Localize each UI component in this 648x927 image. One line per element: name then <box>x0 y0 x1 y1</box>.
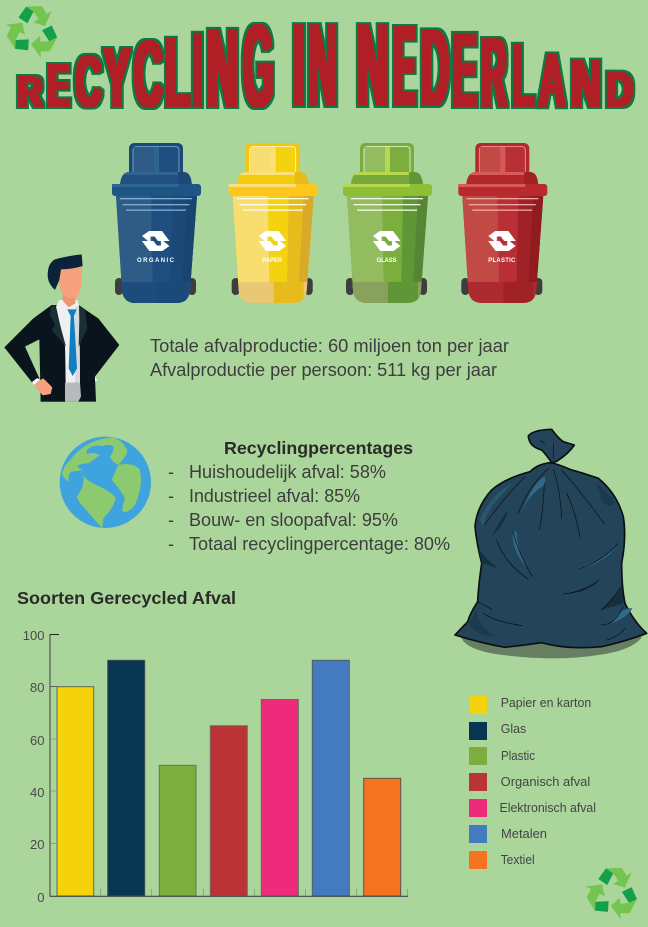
icon: green glass bin <box>343 143 432 303</box>
icon: recycling symbol top left <box>2 6 62 60</box>
title: C <box>134 23 163 127</box>
bar: Glas 90 <box>108 660 145 896</box>
bar: Metalen 90 <box>312 660 349 896</box>
bar: Organisch afval 65 <box>210 726 247 896</box>
title <box>18 0 633 131</box>
axis labels: 60 <box>30 733 44 748</box>
icon: recycling symbol bottom right <box>581 868 641 922</box>
legend: Papier en karton <box>501 696 591 710</box>
icon: garbage bag <box>455 429 647 658</box>
title: A <box>539 37 565 123</box>
title: L <box>165 18 190 127</box>
icon: blue organic bin <box>112 143 201 303</box>
title: N <box>357 0 388 130</box>
title: N <box>571 46 601 120</box>
list: percentages: Totaal recyclingpercentage: 80% <box>189 534 450 554</box>
bar: Plastic 50 <box>159 765 196 896</box>
icon: red plastic bin: PLASTIC <box>488 258 516 264</box>
bar: Textiel 45 <box>364 778 401 896</box>
heading: chart title: Soorten Gerecycled Afval <box>17 588 236 608</box>
text: waste totals: Totale afvalproductie: 60 miljoen ton per jaar <box>150 336 509 356</box>
legend: Metalen <box>501 827 547 841</box>
legend <box>469 696 596 869</box>
list: percentages: Industrieel afval: 85% <box>189 486 360 506</box>
title: E <box>394 2 416 129</box>
axis labels: 80 <box>30 680 44 695</box>
list: percentages: - <box>168 486 174 506</box>
title: N <box>207 6 238 130</box>
axis labels: 100 <box>23 628 44 643</box>
bar chart <box>23 628 408 905</box>
text: waste totals: Afvalproductie per persoon: 511 kg per jaar <box>150 360 497 380</box>
axis labels: 40 <box>30 785 44 800</box>
list: percentages: - <box>168 462 174 482</box>
list: percentages <box>168 462 450 554</box>
title: Y <box>104 30 130 124</box>
legend: Organisch afval <box>501 775 590 789</box>
title: D <box>421 8 449 129</box>
title: I <box>192 11 202 129</box>
icon: green glass bin: GLASS <box>376 258 396 264</box>
axis labels: 20 <box>30 837 44 852</box>
legend: Textiel <box>501 853 535 867</box>
legend: Plastic <box>501 749 535 763</box>
title: I <box>293 0 305 130</box>
bar: Papier en karton 80 <box>57 687 94 896</box>
icon: yellow paper bin: PAPER <box>262 258 283 264</box>
title: D <box>606 63 633 117</box>
axis labels: 0 <box>37 890 44 905</box>
text: recycling percentages <box>168 438 450 554</box>
icon: globe <box>60 437 151 529</box>
title: E <box>452 11 477 129</box>
list: percentages: Bouw- en sloopafval: 95% <box>189 510 398 530</box>
title: E <box>48 53 70 120</box>
legend: Elektronisch afval <box>500 801 596 815</box>
icon: businessman <box>4 254 119 402</box>
title: R <box>18 69 42 116</box>
legend: Glas <box>501 722 526 736</box>
icon: red plastic bin <box>458 143 547 303</box>
axis labels <box>23 628 44 905</box>
icon: blue organic bin: ORGANIC <box>137 258 175 264</box>
title: R <box>482 19 506 127</box>
title: C <box>75 42 102 121</box>
list: percentages: - <box>168 534 174 554</box>
title: G <box>243 3 273 131</box>
list: percentages: Huishoudelijk afval: 58% <box>189 462 386 482</box>
heading: recycling percentages: Recyclingpercentages <box>224 438 413 458</box>
list: percentages: - <box>168 510 174 530</box>
title: N <box>308 1 337 130</box>
title: L <box>513 27 534 126</box>
bar: Elektronisch afval 75 <box>261 700 298 896</box>
text: waste totals <box>150 336 509 380</box>
icon: yellow paper bin <box>229 143 318 303</box>
